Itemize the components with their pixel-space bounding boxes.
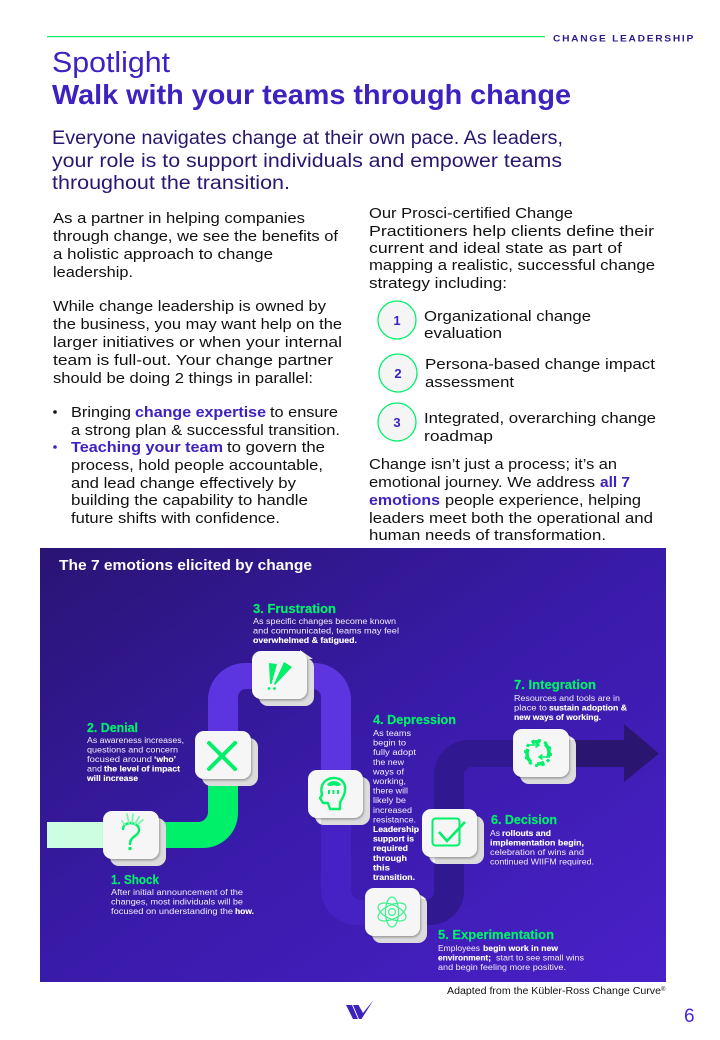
caption: and (87, 764, 102, 774)
item 3: Integrated, overarching change (424, 410, 656, 427)
left column bullets: to govern the (227, 439, 325, 456)
card and question icon (103, 811, 166, 866)
caption: working, (372, 777, 406, 786)
caption (514, 678, 627, 722)
right column intro: current and ideal state as part of (369, 240, 623, 257)
item 2: Persona-based change impact (425, 356, 656, 373)
left column paragraphs: While change leadership is owned by (53, 298, 327, 315)
caption: required (373, 844, 408, 853)
right column intro: mapping a realistic, successful change (369, 257, 655, 274)
caption: focused on understanding the (111, 907, 234, 916)
caption: start to see small wins (496, 954, 584, 962)
card and head icon (308, 770, 370, 825)
left column paragraphs (53, 210, 342, 387)
caption: focused around (87, 755, 152, 764)
caption: 7. Integration (514, 678, 596, 692)
panel: 7 emotions (40, 548, 666, 982)
caption: begin to (373, 739, 407, 748)
step 1: shock (103, 811, 254, 916)
item 1 (378, 301, 591, 342)
caption: and communicated, teams may feel (253, 626, 399, 636)
caption (438, 928, 584, 972)
caption: Employees (438, 944, 480, 953)
caption: and begin feeling more positive. (438, 963, 566, 972)
step 4: depression (308, 713, 456, 882)
caption: 6. Decision (491, 813, 557, 827)
card and exclamation icon (252, 650, 314, 706)
left column bullets: Teaching your team (71, 439, 223, 456)
item 3 (378, 403, 656, 445)
caption: Resources and tools are in (514, 694, 620, 703)
caption: resistance. (373, 815, 416, 824)
source note: Adapted from the Kübler-Ross Change Curve (447, 986, 661, 997)
caption (86, 721, 184, 783)
left column bullets: building the capability to handle (71, 492, 308, 509)
source note: ® (661, 986, 666, 993)
caption: changes, most individuals will be (111, 898, 244, 906)
left column paragraphs: As a partner in helping companies (53, 210, 305, 227)
caption: begin work in new (483, 944, 559, 953)
title (52, 47, 571, 110)
caption: Leadership (373, 825, 419, 834)
left column paragraphs: through change, we see the benefits of (53, 228, 339, 245)
numbered list (378, 301, 656, 445)
caption: new ways of working. (514, 713, 601, 722)
caption: the level of impact (104, 764, 180, 774)
caption: ways of (372, 767, 405, 776)
right column closing paragraph: people experience, helping (445, 492, 641, 509)
left column bullets: Bringing (71, 404, 131, 421)
left column paragraphs: leadership. (53, 264, 133, 281)
caption (111, 873, 254, 916)
caption: environment; (438, 954, 491, 962)
right column closing paragraph: all 7 (600, 474, 630, 491)
card and atom icon (365, 888, 427, 943)
change curve path (47, 663, 659, 925)
caption: After initial announcement of the (111, 888, 244, 897)
caption: As awareness increases, (87, 736, 184, 745)
page number: 6 (684, 1006, 695, 1027)
caption: continued WIIFM required. (490, 858, 594, 866)
caption: there will (373, 787, 408, 796)
step 3: frustration (252, 602, 399, 706)
item 2: 2 (394, 366, 402, 381)
caption: 1. Shock (111, 873, 159, 887)
caption: 4. Depression (373, 713, 456, 727)
step 2: denial (86, 721, 258, 786)
caption: through (373, 854, 407, 863)
right column closing paragraph: emotions (369, 492, 440, 509)
card and gear icon (513, 729, 576, 784)
left column bullets: process, hold people accountable, (71, 457, 323, 474)
caption: place to (514, 704, 548, 712)
left column bullets: and lead change effectively by (71, 475, 297, 492)
item 1: 1 (393, 313, 401, 328)
left column paragraphs: larger initiatives or when your internal (53, 334, 342, 351)
item 1: evaluation (424, 325, 502, 342)
title: Spotlight (52, 47, 170, 79)
left column paragraphs: should be doing 2 things in parallel: (53, 370, 313, 387)
right column closing paragraph: leaders meet both the operational and (369, 510, 653, 527)
intro text: your role is to support individuals and empower teams (52, 151, 562, 172)
right column closing paragraph (369, 456, 653, 544)
right column intro (369, 205, 655, 292)
item 3: 3 (393, 415, 401, 430)
step 5: experimentation (365, 888, 584, 972)
caption: this (373, 863, 391, 872)
right column closing paragraph: emotional journey. We address (369, 474, 595, 491)
right column closing paragraph: human needs of transformation. (369, 527, 606, 544)
caption: 3. Frustration (253, 602, 336, 616)
caption: increased (373, 806, 412, 815)
left column paragraphs: the business, you may want help on the (53, 316, 342, 333)
header rule and section label: CHANGE LEADERSHIP (553, 34, 695, 44)
caption: fully adopt (373, 748, 417, 757)
caption: celebration of wins and (490, 848, 584, 857)
icon: logo (346, 1000, 374, 1019)
caption: As specific changes become known (253, 617, 396, 626)
caption: implementation begin, (490, 838, 584, 848)
caption: the new (373, 758, 404, 767)
left column bullets: to ensure (270, 404, 338, 421)
caption: 5. Experimentation (438, 928, 554, 942)
intro text: Everyone navigates change at their own pace. As leaders, (52, 128, 563, 149)
caption: ‘who’ (154, 755, 176, 764)
caption: transition. (373, 873, 415, 882)
intro text (52, 128, 563, 194)
card and X icon (195, 731, 258, 786)
caption: As (490, 829, 500, 838)
left column bullets (53, 404, 340, 527)
caption: overwhelmed & fatigued. (253, 636, 357, 645)
caption: As teams (373, 729, 411, 738)
caption: sustain adoption & (549, 704, 627, 712)
caption: support is (373, 835, 415, 844)
right column closing paragraph: Change isn’t just a process; it’s an (369, 456, 617, 473)
item 2: assessment (425, 374, 515, 391)
left column bullets: future shifts with confidence. (71, 510, 280, 527)
left column paragraphs: team is full-out. Your change partner (53, 352, 333, 369)
caption: 2. Denial (87, 721, 138, 735)
caption (253, 602, 399, 645)
caption (372, 713, 456, 882)
step 7: integration (513, 678, 627, 784)
intro text: throughout the transition. (52, 173, 290, 194)
step 6: decision (422, 809, 594, 866)
caption: will increase (86, 774, 139, 783)
left column bullets: a strong plan & successful transition. (71, 422, 340, 439)
right column intro: strategy including: (369, 275, 507, 292)
panel heading: The 7 emotions elicited by change (59, 557, 312, 574)
caption (490, 813, 594, 866)
title: Walk with your teams through change (52, 79, 571, 110)
caption: likely be (373, 796, 407, 805)
caption: questions and concern (87, 746, 178, 754)
item 2 (379, 354, 656, 392)
caption: how. (235, 907, 254, 916)
left column paragraphs: a holistic approach to change (53, 246, 273, 263)
right column intro: Our Prosci-certified Change (369, 205, 573, 222)
right column intro: Practitioners help clients define their (369, 223, 654, 240)
left column bullets: change expertise (135, 404, 266, 421)
card and checkbox icon (422, 809, 484, 864)
item 1: Organizational change (424, 308, 591, 325)
item 3: roadmap (424, 428, 493, 445)
caption: rollouts and (502, 829, 551, 838)
